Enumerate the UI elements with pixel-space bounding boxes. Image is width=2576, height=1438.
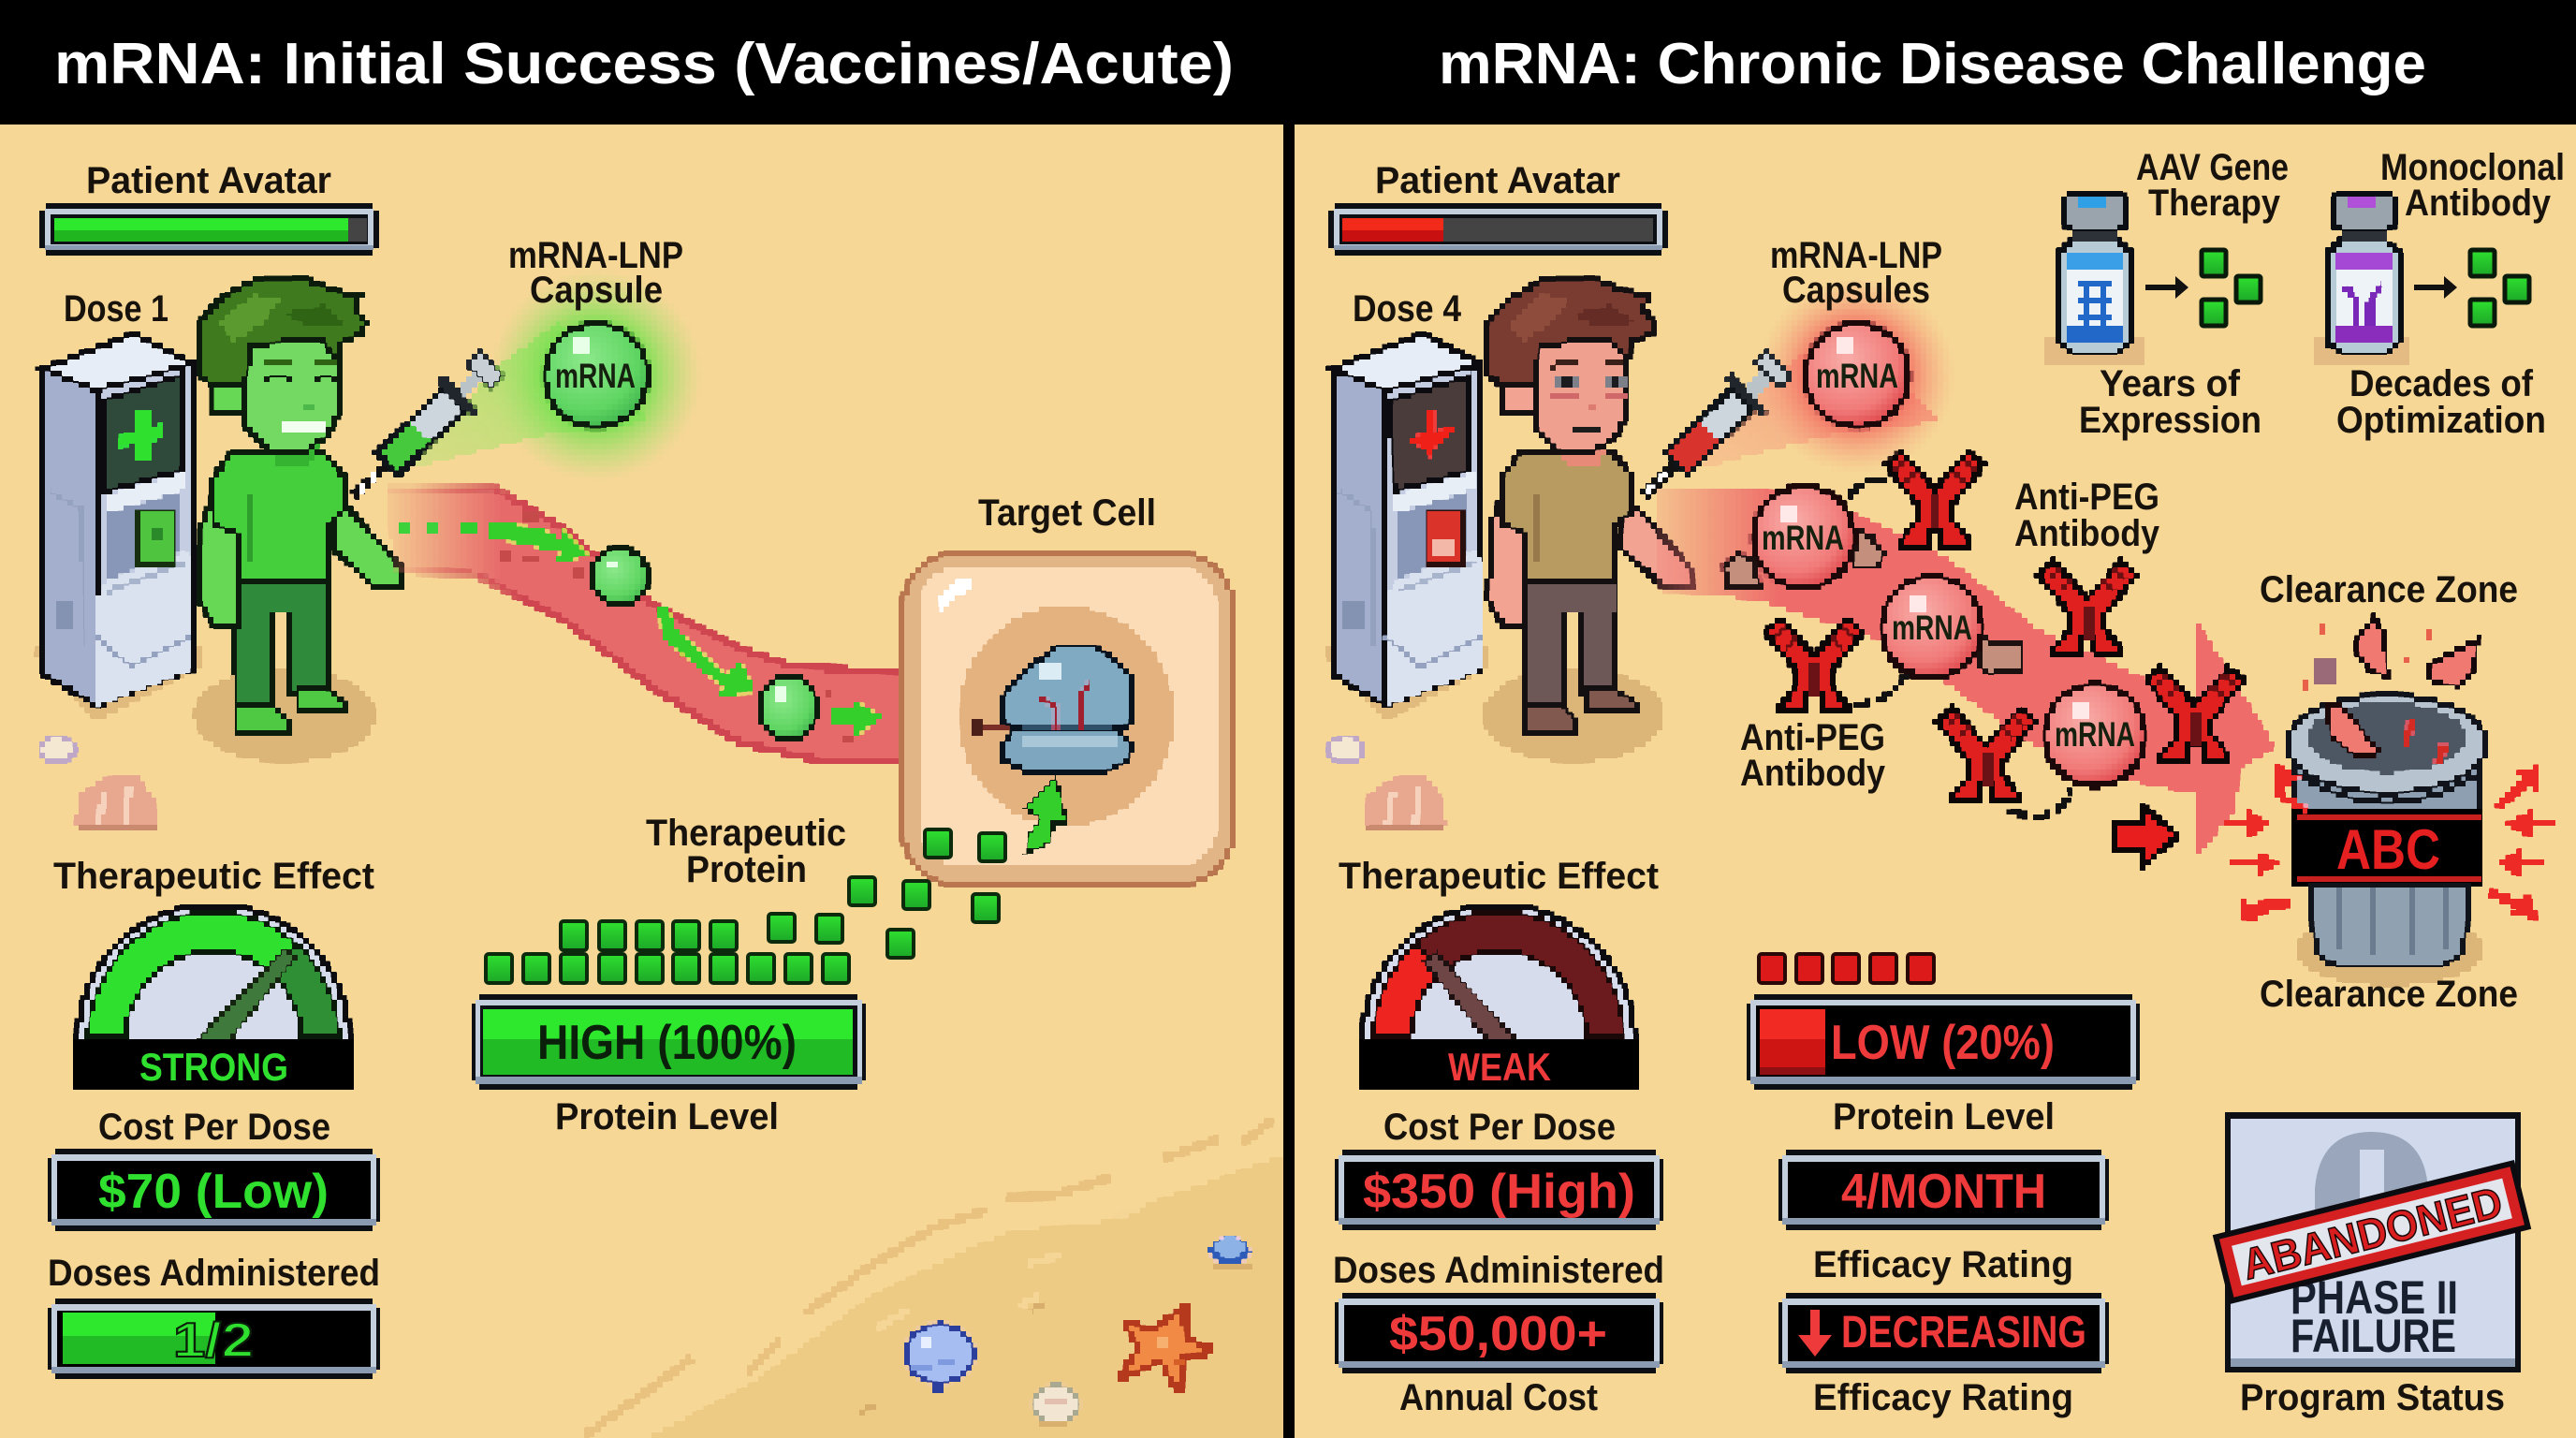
arrow and expression blocks: AAV bbox=[2145, 250, 2261, 326]
title: left panel: mRNA: Initial Success (Vaccines/Acute) bbox=[54, 32, 1234, 96]
title: right panel: mRNA: Chronic Disease Challenge bbox=[1439, 32, 2426, 96]
divider between panels bbox=[1283, 0, 1295, 1438]
value: $50,000+: $50,000+ bbox=[1389, 1307, 1607, 1361]
label: years of expression: Expression bbox=[2079, 400, 2261, 441]
value: weak: WEAK bbox=[1448, 1045, 1551, 1089]
label: capsule mRNA top: mRNA bbox=[1816, 357, 1898, 395]
icon: antibody five bbox=[2146, 668, 2244, 761]
icon: white shell bbox=[1031, 1384, 1081, 1427]
label: capsule mRNA one: mRNA bbox=[1762, 519, 1844, 557]
efficacy rating box bbox=[1778, 1293, 2109, 1373]
icon: antibody one bbox=[1886, 452, 1983, 546]
label: clearance zone top: Clearance Zone bbox=[2260, 569, 2518, 610]
panel: right, chronic disease bbox=[1295, 0, 2576, 1418]
annual cost box bbox=[1335, 1293, 1663, 1373]
icon: syringe bbox=[1626, 345, 1798, 514]
icon: syringe bbox=[337, 345, 509, 514]
icon: anti-PEG antibody links bbox=[1849, 479, 2071, 816]
label: doses administered: Doses Administered bbox=[48, 1253, 380, 1294]
icon: mRNA-LNP capsule top bbox=[1806, 324, 1909, 427]
label: decades of optimization bbox=[2336, 363, 2546, 441]
label: therapeutic effect: Therapeutic Effect bbox=[1339, 856, 1659, 897]
label: mRNA-LNP capsules: Capsules bbox=[1782, 270, 1930, 311]
label: AAV gene therapy bbox=[2136, 147, 2289, 224]
label: phase II failure bbox=[2291, 1271, 2458, 1362]
label: efficacy rating upper: Efficacy Rating bbox=[1813, 1244, 2073, 1285]
label: mRNA on capsule: mRNA bbox=[555, 357, 636, 395]
label: monoclonal antibody bbox=[2380, 147, 2565, 224]
icon: capsule three bbox=[2044, 684, 2145, 785]
icon: red glow beam bbox=[1701, 278, 1954, 473]
title: right panel bbox=[1295, 0, 2576, 125]
label: anti-PEG antibody upper: Anti-PEG bbox=[2014, 477, 2159, 518]
label: therapeutic protein: Therapeutic bbox=[646, 813, 846, 854]
icon: small blue shell bbox=[1209, 1237, 1251, 1269]
icon: red LNP stream bbox=[1657, 487, 2276, 858]
label: therapeutic protein: Protein bbox=[686, 849, 807, 890]
label: mRNA-LNP capsule: Capsule bbox=[530, 270, 663, 311]
label: anti-PEG antibody upper: Antibody bbox=[2014, 513, 2160, 554]
icon: treatment kiosk bbox=[36, 334, 201, 721]
value: decreasing: DECREASING bbox=[1841, 1308, 2086, 1357]
arrow: toward clearance bbox=[2113, 807, 2177, 865]
icon: healthy patient avatar bbox=[194, 280, 402, 762]
label: therapeutic protein bbox=[646, 813, 846, 890]
label: dose 4: Dose 4 bbox=[1353, 288, 1462, 330]
icon: fatigued patient avatar bbox=[1483, 280, 1691, 762]
label: patient avatar: Patient Avatar bbox=[1375, 160, 1620, 201]
label: cost per dose: Cost Per Dose bbox=[98, 1107, 330, 1148]
dosing frequency box bbox=[1778, 1150, 2109, 1230]
label: capsule mRNA three: mRNA bbox=[2055, 715, 2135, 754]
icon: bloodstream vessel bbox=[386, 488, 900, 760]
icon: LNP capsules in bloodstream bbox=[592, 549, 817, 740]
panel: left, vaccines and acute bbox=[0, 0, 1284, 1438]
value: strong: STRONG bbox=[139, 1045, 288, 1089]
label: phase II failure: PHASE II bbox=[2291, 1271, 2458, 1324]
value: $70 low: $70 (Low) bbox=[98, 1165, 329, 1219]
label: doses administered: Doses Administered bbox=[1333, 1250, 1664, 1291]
doses administered box bbox=[48, 1299, 380, 1379]
icon: capsule two bbox=[1881, 577, 1983, 678]
label: annual cost: Annual Cost bbox=[1399, 1377, 1598, 1418]
label: therapeutic effect: Therapeutic Effect bbox=[53, 856, 374, 897]
icon: weak effect gauge bbox=[1360, 902, 1637, 1089]
label: anti-PEG antibody upper bbox=[2014, 477, 2160, 554]
label: dose 1: Dose 1 bbox=[64, 288, 168, 330]
title: left panel bbox=[0, 0, 1284, 125]
label: patient avatar: Patient Avatar bbox=[86, 160, 331, 201]
value: low 20%: LOW (20%) bbox=[1831, 1016, 2055, 1070]
value: 4 per month: 4/MONTH bbox=[1841, 1165, 2046, 1219]
arrow and expression blocks: antibody bbox=[2414, 250, 2529, 326]
icon: antibody four bbox=[1938, 709, 2035, 802]
protein level bar: high bbox=[472, 994, 866, 1090]
wet sand shoreline bbox=[585, 1121, 1284, 1438]
value: high 100%: HIGH (100%) bbox=[537, 1016, 797, 1070]
health bar: low bbox=[1328, 203, 1668, 256]
icon: mRNA-LNP capsule bbox=[545, 324, 648, 427]
label: AAV gene therapy: Therapy bbox=[2148, 183, 2281, 224]
program status card bbox=[2225, 1112, 2521, 1372]
label: mRNA-LNP capsule: mRNA-LNP bbox=[508, 235, 683, 276]
cost per dose box bbox=[48, 1149, 380, 1231]
label: protein level: Protein Level bbox=[555, 1096, 779, 1137]
icon: green glow beam bbox=[412, 271, 701, 480]
icon: treatment kiosk bbox=[1325, 334, 1490, 721]
label: phase II failure: FAILURE bbox=[2291, 1310, 2456, 1362]
icon: beach shells bbox=[37, 736, 157, 827]
icon: AAV vial bbox=[2046, 193, 2143, 363]
icon: strong effect gauge bbox=[75, 902, 352, 1088]
value: 1 of 2 doses: 1/2 bbox=[173, 1313, 254, 1368]
label: ABC: ABC bbox=[2336, 818, 2440, 881]
label: anti-PEG antibody lower: Anti-PEG bbox=[1740, 717, 1885, 758]
health bar: full bbox=[39, 203, 379, 256]
protein level bar: low bbox=[1747, 994, 2140, 1090]
icon: antibody three bbox=[1765, 619, 1863, 712]
icon: clearance trash can bbox=[2288, 696, 2486, 986]
label: mRNA-LNP capsule bbox=[508, 235, 683, 311]
icon: target cell with ribosome bbox=[900, 550, 1237, 888]
right pixel art layer bbox=[1325, 193, 2554, 1089]
label: mRNA-LNP capsules: mRNA-LNP bbox=[1770, 235, 1942, 276]
label: clearance zone bottom: Clearance Zone bbox=[2260, 974, 2518, 1015]
label: monoclonal antibody: Antibody bbox=[2405, 183, 2552, 224]
label: anti-PEG antibody lower bbox=[1740, 717, 1886, 794]
label: program status: Program Status bbox=[2240, 1377, 2505, 1418]
icon: therapeutic protein blocks bbox=[486, 829, 1005, 983]
label: mRNA-LNP capsules bbox=[1770, 235, 1942, 311]
label: years of expression bbox=[2079, 363, 2261, 441]
label: decades of optimization: Decades of bbox=[2349, 363, 2534, 404]
icon: low protein blocks bbox=[1759, 954, 1934, 983]
icon: monoclonal antibody vial bbox=[2315, 193, 2411, 363]
label: protein level: Protein Level bbox=[1833, 1096, 2055, 1137]
icon: antibody two bbox=[2039, 562, 2136, 655]
stamp: abandoned: ABANDONED bbox=[2237, 1177, 2507, 1289]
icon: capsule one bbox=[1753, 487, 1854, 588]
label: anti-PEG antibody lower: Antibody bbox=[1740, 753, 1886, 794]
icon: PEG fragments bbox=[1724, 530, 2022, 674]
label: cost per dose: Cost Per Dose bbox=[1383, 1107, 1616, 1148]
icon: beach shells bbox=[1326, 736, 1446, 827]
value: $350 high: $350 (High) bbox=[1363, 1165, 1635, 1219]
label: capsule mRNA two: mRNA bbox=[1892, 609, 1972, 647]
label: target cell: Target Cell bbox=[978, 492, 1156, 534]
icon: blue shell bbox=[903, 1322, 976, 1393]
left pixel art layer bbox=[36, 271, 1284, 1438]
icon: starfish bbox=[1116, 1303, 1213, 1395]
label: efficacy rating lower: Efficacy Rating bbox=[1813, 1377, 2073, 1418]
cost per dose box bbox=[1335, 1150, 1663, 1230]
label: years of expression: Years of bbox=[2100, 363, 2241, 404]
icon: flying capsule shards and debris bbox=[2301, 618, 2477, 691]
icon: green dose flow arrows bbox=[401, 521, 882, 740]
label: decades of optimization: Optimization bbox=[2336, 400, 2546, 441]
icon: red clearance arrows bbox=[2225, 764, 2554, 923]
label: AAV gene therapy: AAV Gene bbox=[2136, 147, 2289, 188]
